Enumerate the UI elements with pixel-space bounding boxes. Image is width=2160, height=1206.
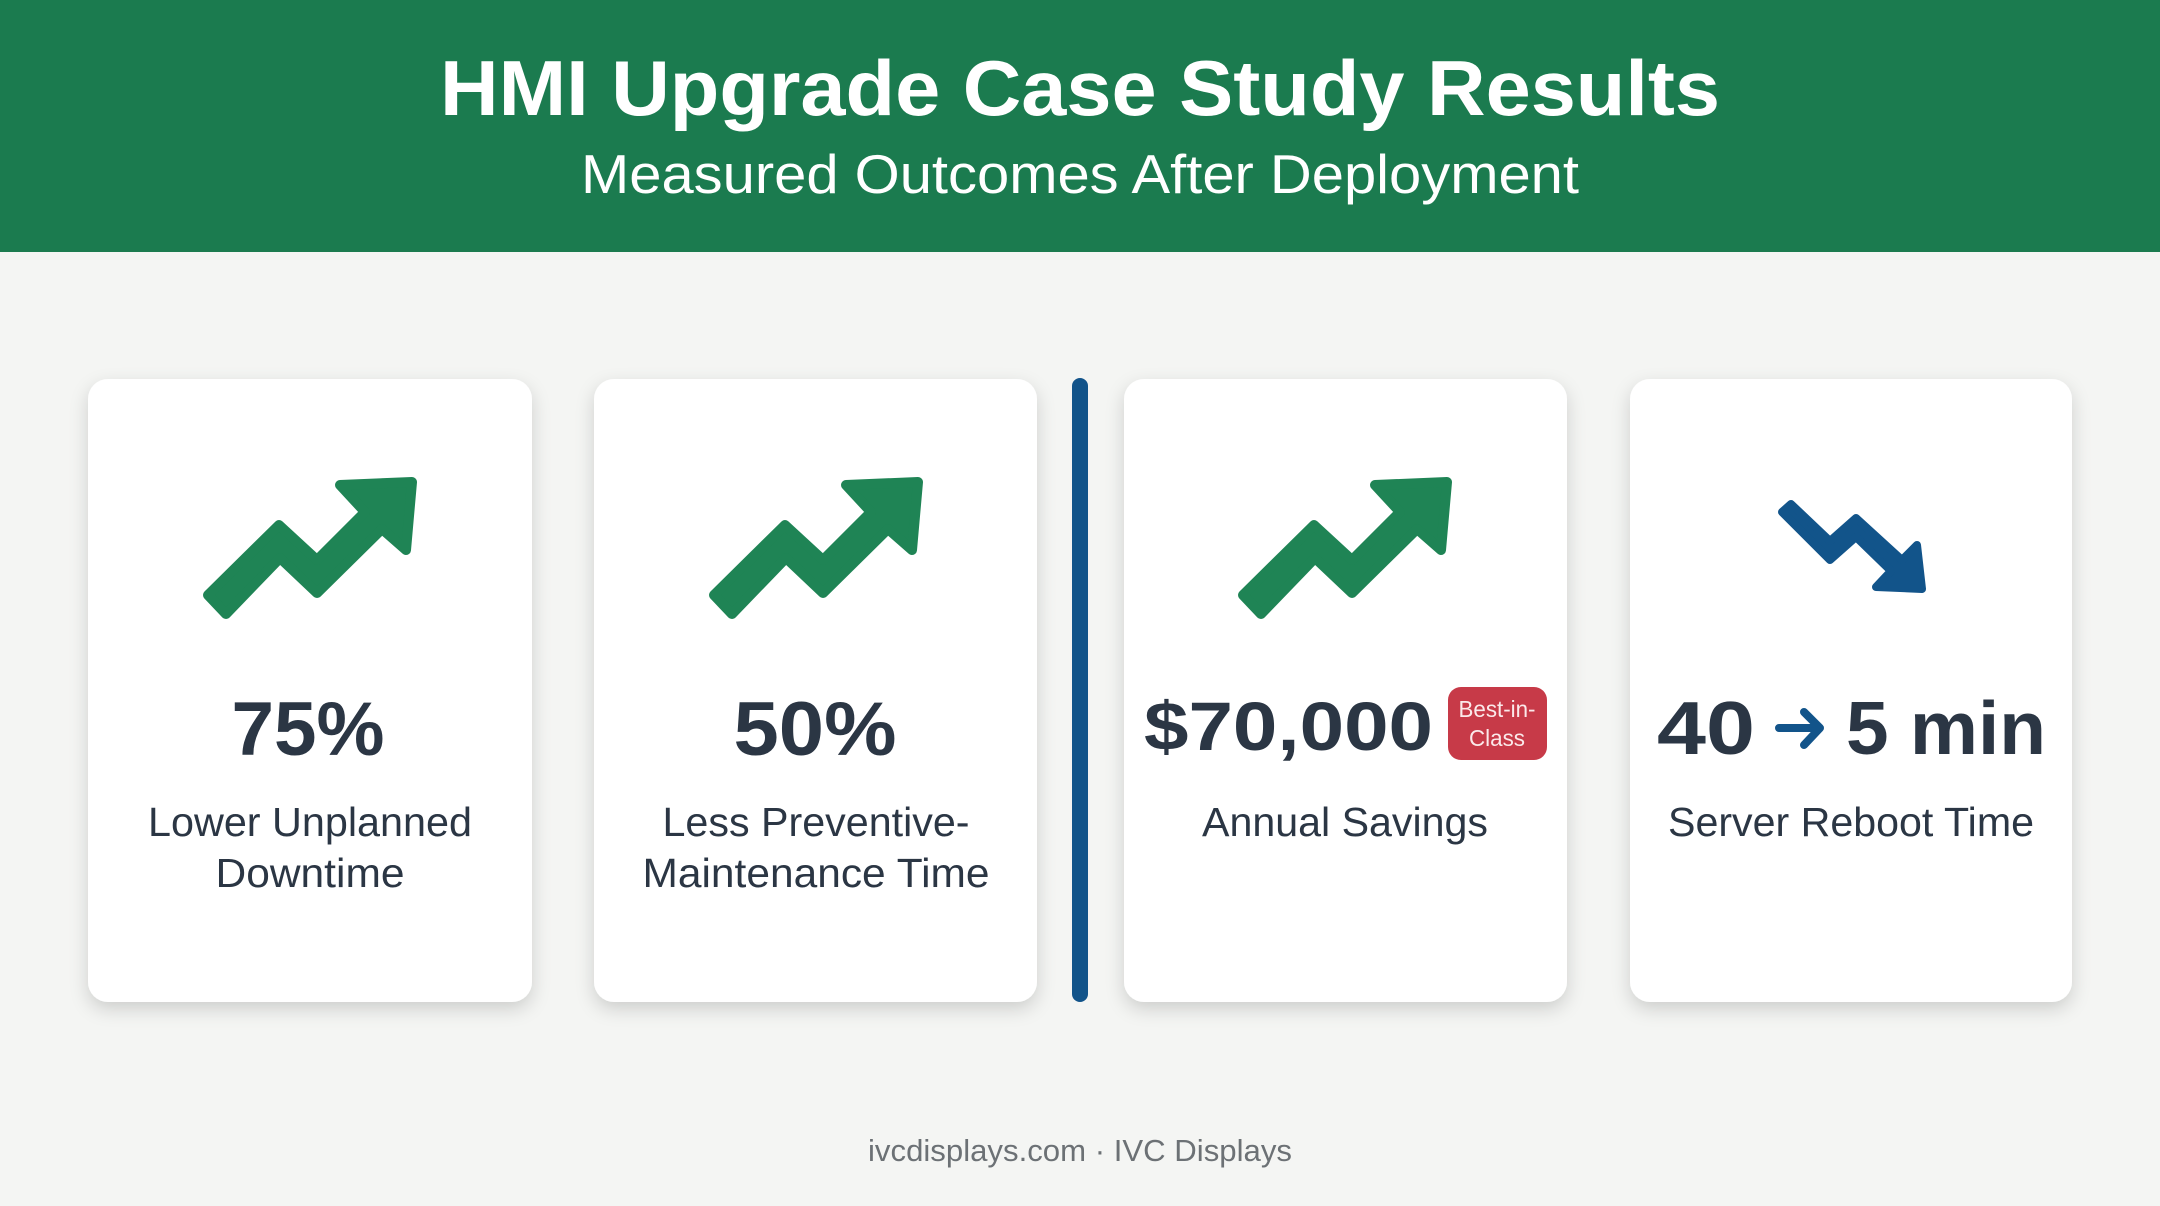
label: Less Preventive- — [662, 799, 970, 845]
header band — [0, 0, 2160, 252]
stat: 75%: 75% — [232, 687, 384, 772]
panel: annual savings — [1124, 379, 1567, 1002]
footer: ivcdisplays.com · IVC Displays — [868, 1133, 1292, 1168]
label: Annual Savings — [1202, 799, 1488, 845]
title: HMI Upgrade Case Study Results — [440, 44, 1720, 132]
icon: arrow right — [1779, 712, 1820, 745]
panel: less preventive maintenance time — [594, 379, 1037, 1002]
icon: green up trend arrow — [1243, 482, 1447, 614]
badge: best-in-class — [1448, 687, 1547, 760]
stat: 5 min: 5 min — [1846, 686, 2046, 770]
badge: best-in-class: Class — [1469, 725, 1525, 751]
icon: green up trend arrow — [208, 482, 412, 614]
badge: best-in-class: Best-in- — [1458, 696, 1536, 722]
icon: blue down trend arrow — [1782, 504, 1922, 589]
panel: server reboot time — [1630, 379, 2072, 1002]
stat: $70,000: $70,000 — [1144, 688, 1433, 765]
stat: 50%: 50% — [734, 687, 896, 772]
divider — [1072, 378, 1088, 1002]
stat: 40: 40 — [1657, 686, 1755, 770]
label line 2: Maintenance Time — [642, 850, 990, 896]
label line 2: Downtime — [216, 850, 404, 896]
label: Server Reboot Time — [1668, 799, 2034, 845]
panel: lower unplanned downtime — [88, 379, 532, 1002]
subtitle: Measured Outcomes After Deployment — [581, 143, 1579, 205]
label: Lower Unplanned — [148, 799, 472, 845]
icon: green up trend arrow — [714, 482, 918, 614]
